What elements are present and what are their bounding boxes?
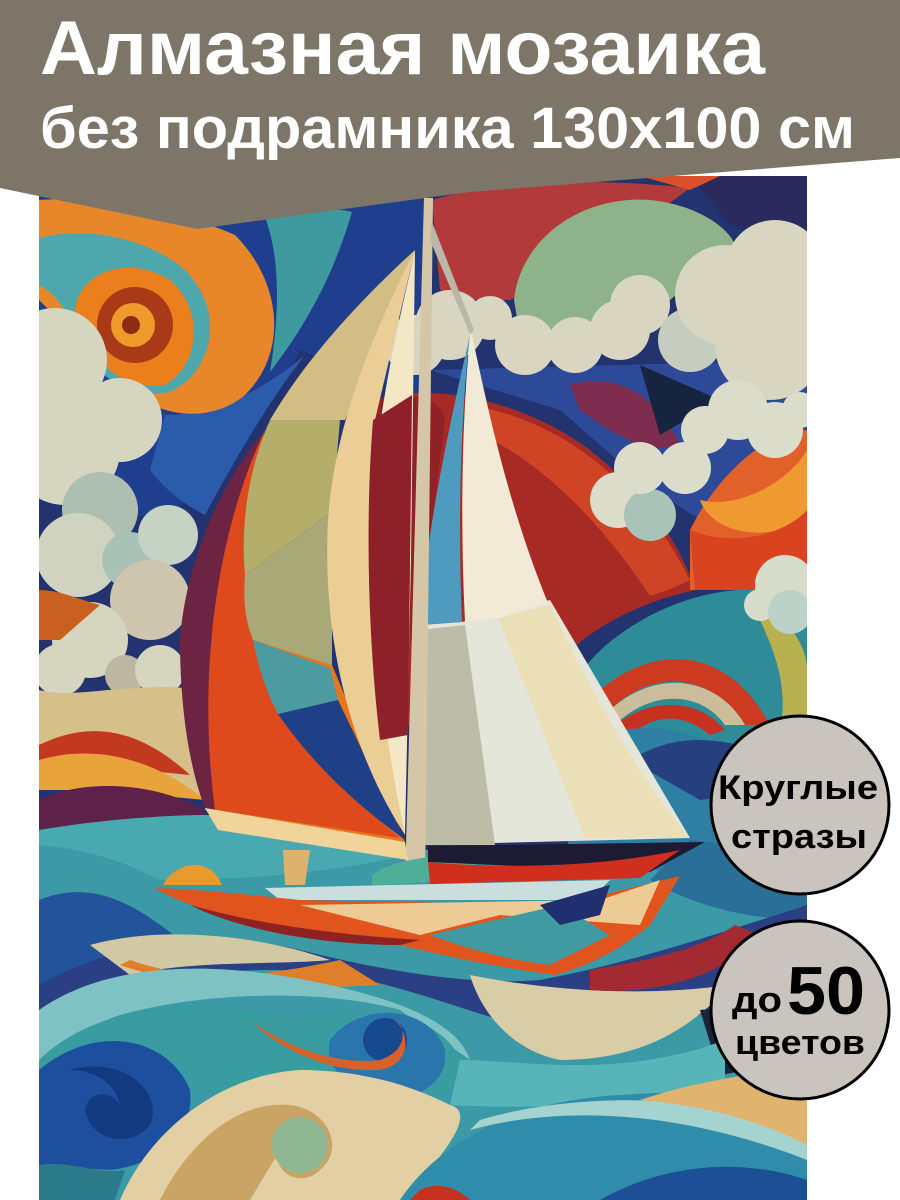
big red sun disc xyxy=(375,393,695,740)
right hill xyxy=(588,590,807,744)
clouds upper right xyxy=(385,220,840,400)
painting: sailboat on abstract waves xyxy=(3,176,840,1200)
title xyxy=(40,6,855,161)
sky: middle band right of sail xyxy=(430,360,807,520)
badge: round rhinestones xyxy=(711,716,889,894)
sail: red gap behind mast xyxy=(369,395,412,740)
hull xyxy=(155,808,705,975)
waves: lower sea xyxy=(39,892,807,1200)
badge: round rhinestones: стразы xyxy=(731,818,867,856)
sky: upper left blue and teal swirl xyxy=(39,176,430,520)
sea: base and waves behind hull xyxy=(39,728,807,1200)
badge: up to 50 colours xyxy=(711,921,889,1099)
sail: cream middle panel xyxy=(327,250,415,835)
badge: up to 50 colours: 50 xyxy=(787,953,865,1029)
clouds right middle xyxy=(590,380,818,541)
sail: right jib xyxy=(416,335,690,845)
clouds far right small xyxy=(744,555,807,634)
title: Алмазная мозаика xyxy=(40,6,766,91)
sail: left mainsail xyxy=(180,250,415,842)
badge: up to 50 colours: до xyxy=(732,979,782,1020)
left hills band xyxy=(39,590,205,850)
clouds left xyxy=(39,308,198,693)
badge: round rhinestones: Круглые xyxy=(718,769,878,807)
rigging and mast xyxy=(405,198,474,882)
subtitle: без подрамника 130х100 см xyxy=(40,96,855,161)
sky: orange spiral sun xyxy=(39,199,274,414)
sky: top red and green dome xyxy=(432,176,807,335)
badge: up to 50 colours: цветов xyxy=(735,1024,865,1062)
orange swirl right xyxy=(690,430,807,590)
header banner xyxy=(0,0,900,229)
